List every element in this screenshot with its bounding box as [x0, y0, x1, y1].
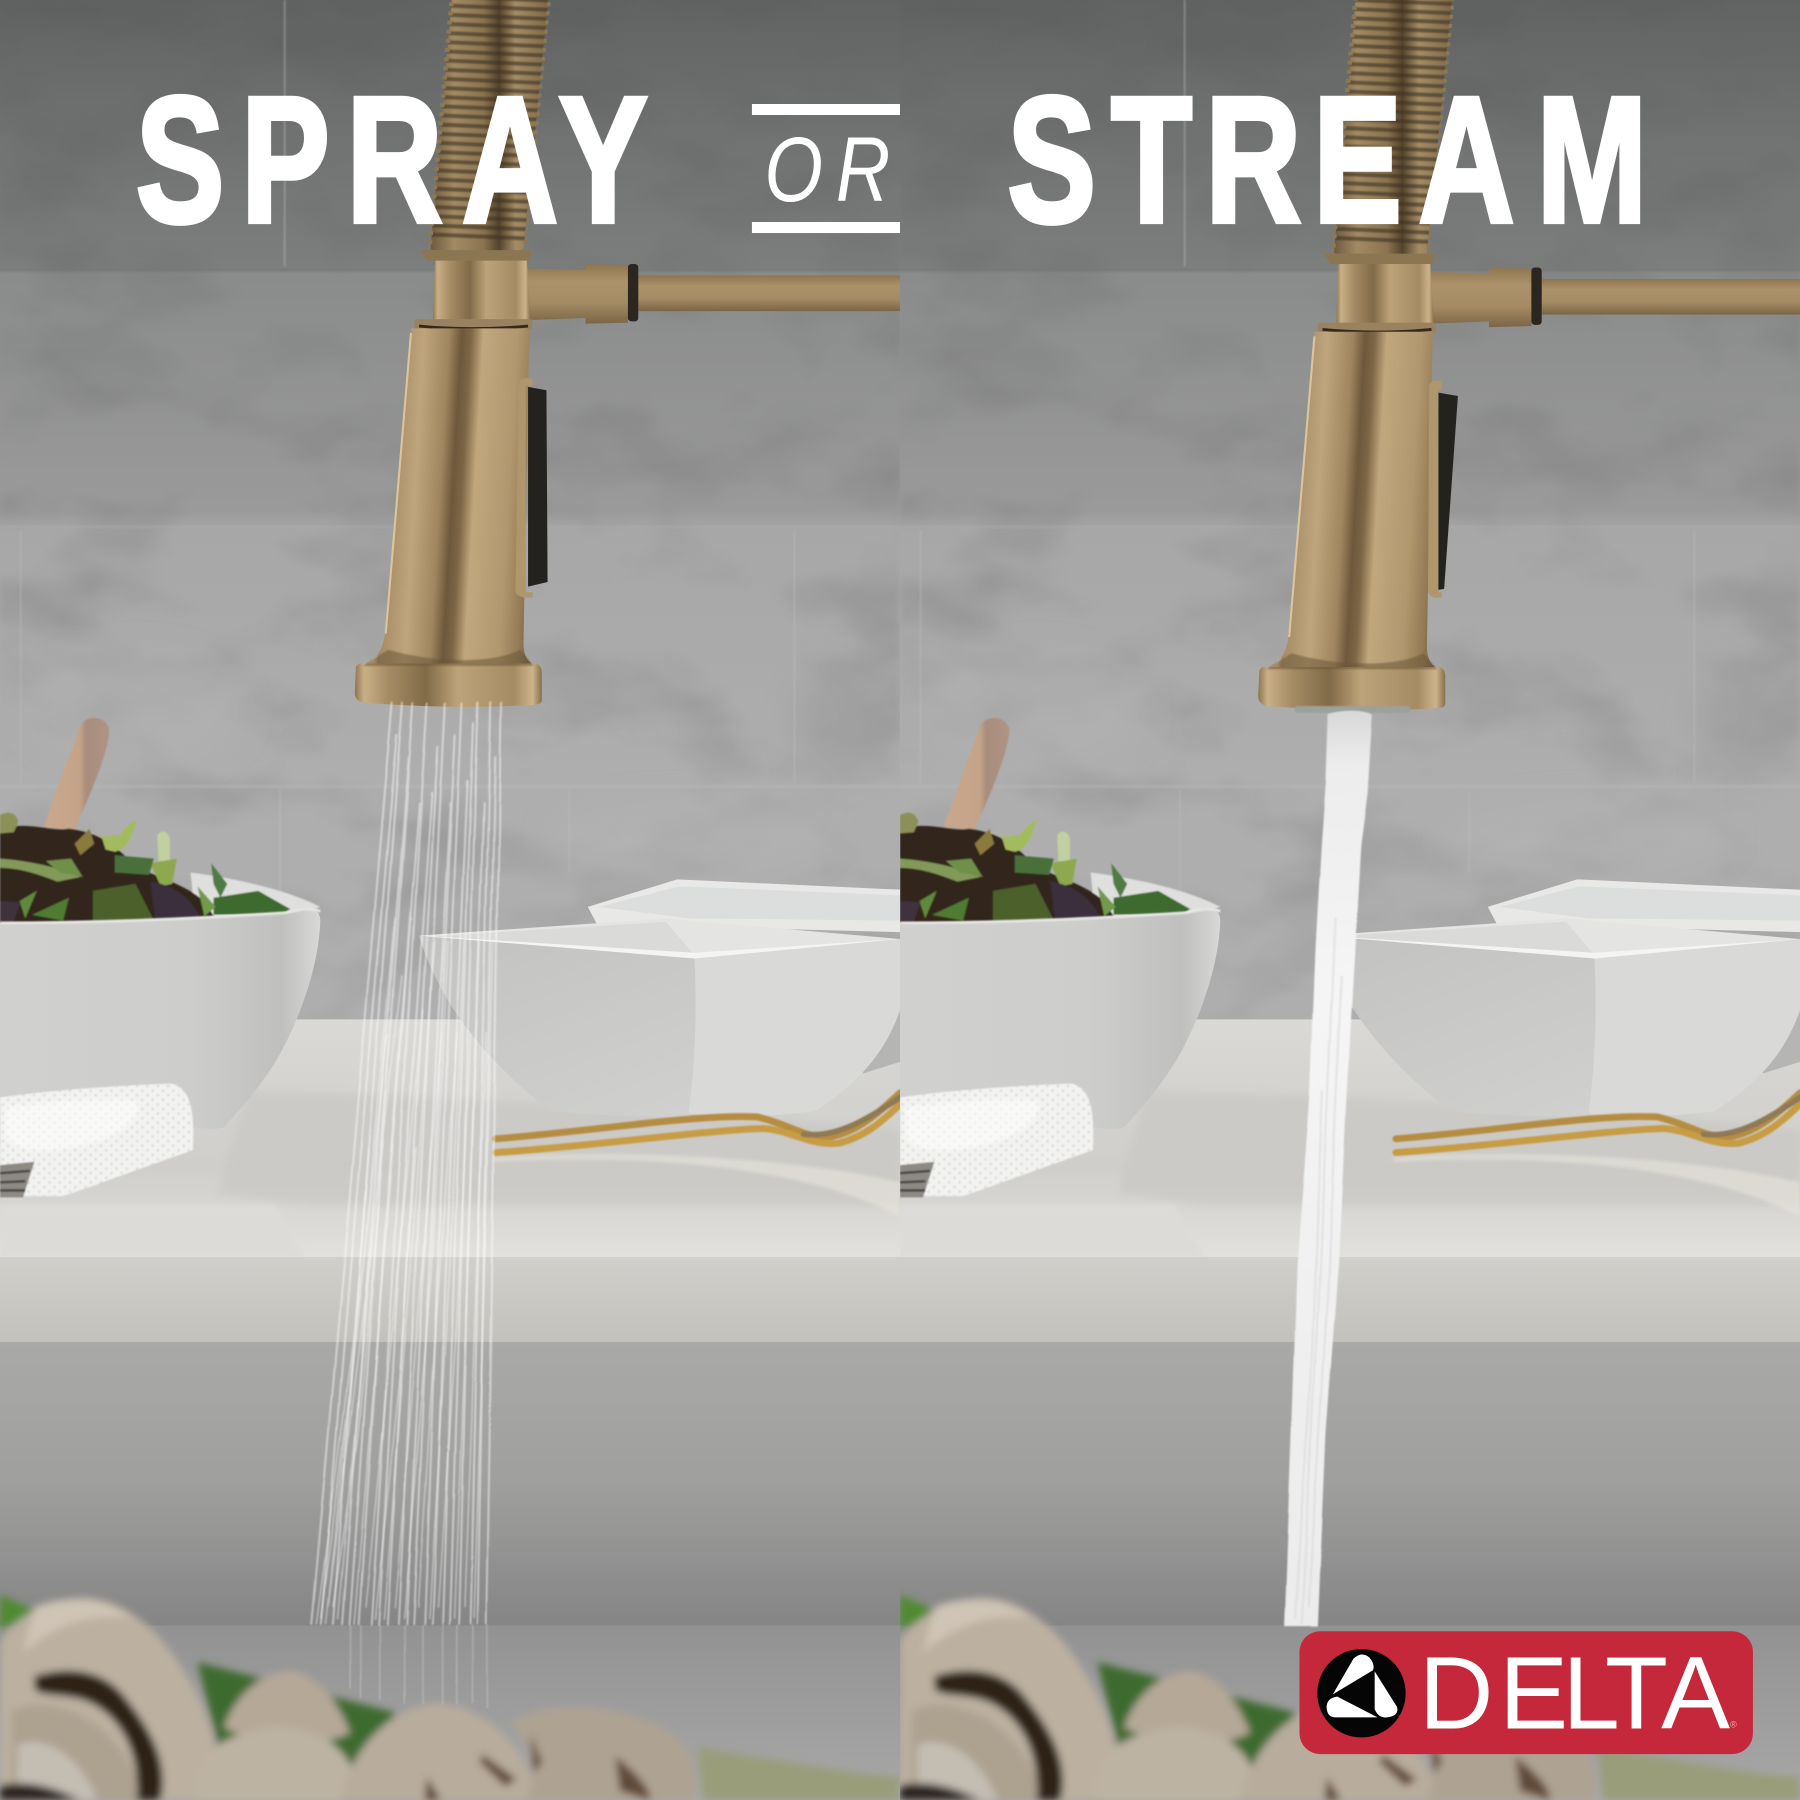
panel: left kitchen scene background	[0, 0, 900, 1800]
panel: right kitchen scene background	[900, 0, 1800, 1800]
marble tile wall	[0, 0, 900, 1022]
blurred mushrooms and greens	[0, 1595, 900, 1800]
flared base ring	[355, 650, 542, 707]
cabinet front	[0, 1342, 900, 1626]
countertop front edge	[0, 1257, 900, 1342]
spray button left	[515, 378, 548, 598]
wordmark: DELTA	[1419, 1635, 1730, 1751]
elbow block	[433, 261, 530, 320]
coiled spring hose	[425, 0, 562, 250]
countertop surface	[0, 1019, 900, 1258]
water spray strands	[312, 703, 501, 1708]
rod connector	[525, 264, 638, 324]
lower blurred surface	[0, 1626, 900, 1800]
stream nozzle	[1295, 706, 1410, 713]
body edge highlight	[386, 333, 411, 634]
title connector: OR with rules: OR	[764, 118, 890, 221]
tapered body	[356, 328, 540, 668]
title: STREAM: STREAM	[1007, 60, 1647, 260]
faucet: left spray head	[355, 0, 900, 707]
collar	[414, 319, 533, 329]
title connector: OR with rules	[752, 104, 900, 233]
folded towel	[0, 1084, 193, 1197]
fork	[496, 1093, 900, 1153]
stream texture	[1295, 918, 1341, 1624]
water stream	[1285, 711, 1372, 1627]
logo: Delta badge	[1299, 1631, 1753, 1754]
logo mark	[1317, 1649, 1406, 1737]
front white square bowl	[419, 918, 900, 1117]
faucet: right stream head	[1258, 0, 1800, 710]
registered mark: ®	[1730, 1720, 1737, 1730]
bowl lip	[0, 909, 320, 923]
salad leaves	[0, 813, 320, 923]
back white bowl	[588, 879, 900, 1073]
horizontal rod	[638, 276, 900, 311]
salad bowl	[0, 909, 320, 1129]
title: SPRAY: SPRAY	[136, 60, 647, 260]
hose collar	[420, 250, 532, 261]
wooden spoon handle	[44, 718, 109, 831]
stream button right	[1428, 380, 1458, 598]
